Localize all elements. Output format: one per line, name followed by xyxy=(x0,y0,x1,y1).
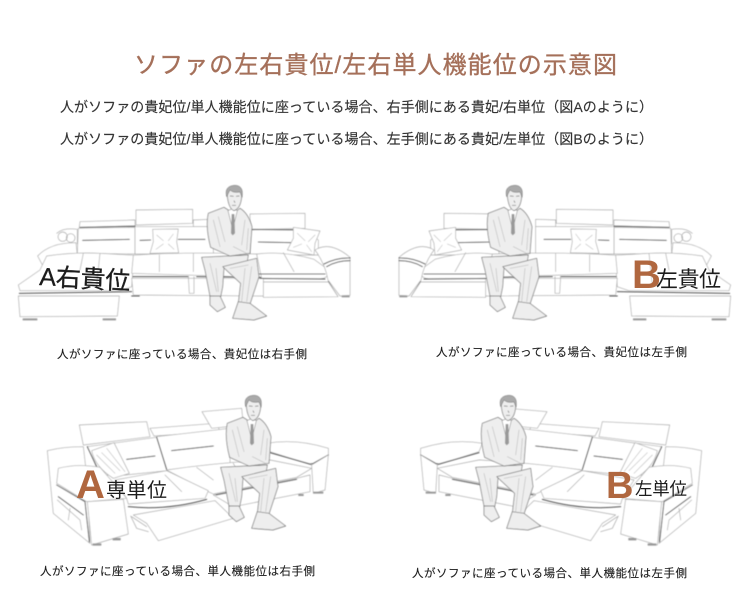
illustration: seated man xyxy=(202,185,267,320)
panel: B single function seat xyxy=(412,395,702,580)
illustration: mirrored recliner sofa xyxy=(421,408,702,546)
illustration: seated man xyxy=(221,395,286,530)
panel: A right chaise xyxy=(18,185,350,361)
caption: 人がソファに座っている場合、貴妃位は右手側 xyxy=(57,347,307,361)
text block: explanation lines xyxy=(60,99,653,147)
label: large B: B xyxy=(606,465,633,507)
illustration: seated man xyxy=(482,185,547,320)
caption: 人がソファに座っている場合、単人機能位は左手側 xyxy=(412,566,687,580)
illustration: mirrored sofa with chaise on the left hand side xyxy=(399,209,731,320)
caption: 人がソファに座っている場合、貴妃位は左手側 xyxy=(436,345,687,359)
panel: A single function seat xyxy=(40,395,328,578)
panel: B left chaise xyxy=(399,185,731,359)
label: 左単位: 左単位 xyxy=(635,479,687,499)
text block: explanation lines: 人がソファの貴妃位/単人機能位に座っている場合、右手側にある貴妃/右単位（図Aのように） xyxy=(60,99,653,115)
caption: 人がソファに座っている場合、単人機能位は右手側 xyxy=(40,564,315,578)
label: 左貴位: 左貴位 xyxy=(656,267,721,292)
illustration: recliner sofa xyxy=(47,408,328,546)
label: large A: A xyxy=(76,463,105,507)
label: 専単位: 専単位 xyxy=(106,479,167,502)
label: A右貴位: A右貴位 xyxy=(39,263,131,296)
title: ソファの左右貴位/左右単人機能位の示意図 xyxy=(134,52,617,79)
text block: explanation lines: 人がソファの貴妃位/単人機能位に座っている場合、左手側にある貴妃/左単位（図Bのように） xyxy=(60,131,653,147)
illustration: sofa with chaise on the right hand side xyxy=(18,209,350,320)
illustration: seated man xyxy=(476,395,541,530)
label: large B: B xyxy=(632,253,661,297)
